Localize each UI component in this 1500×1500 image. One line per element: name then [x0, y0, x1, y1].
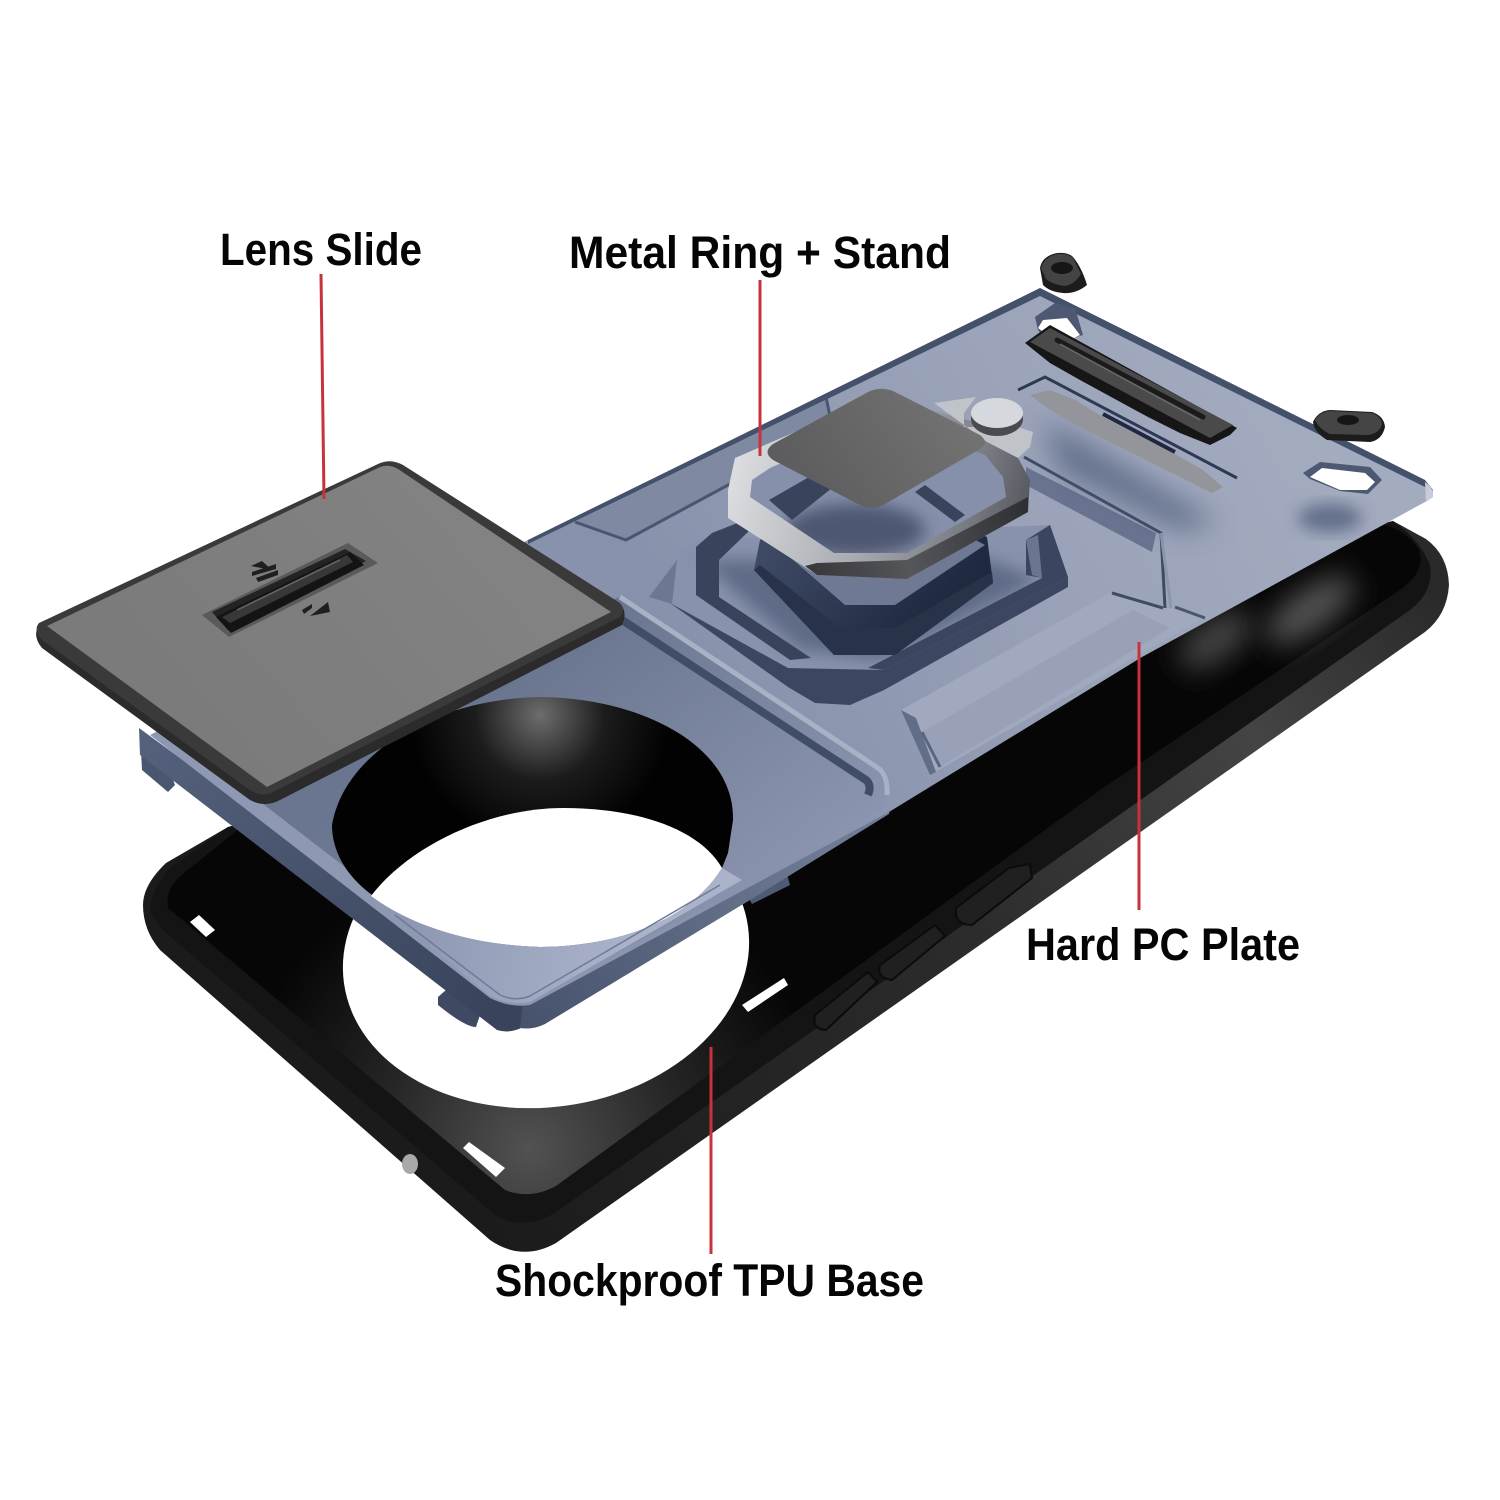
right groove — [868, 525, 1068, 670]
plate holes — [1035, 303, 1083, 345]
pointer: metal ring and stand — [758, 280, 762, 456]
right button — [1313, 410, 1385, 442]
lens panel recess — [180, 597, 887, 1002]
highlights on base interior — [1169, 600, 1261, 680]
base slots — [190, 915, 788, 1177]
platform lower skirt — [670, 577, 1068, 705]
top button — [1040, 253, 1087, 293]
slide arrow down — [302, 602, 330, 616]
shadows — [1043, 420, 1217, 530]
plate lower corner face — [371, 868, 742, 1003]
hexagon facet and line — [1026, 467, 1156, 552]
stand body — [754, 500, 993, 655]
ring band — [728, 395, 1030, 579]
platform shadow — [700, 560, 1040, 660]
hinge — [934, 397, 1033, 458]
slide switch — [202, 543, 378, 637]
pointer: shockproof TPU base — [710, 1047, 712, 1254]
plate right corner lip — [1425, 482, 1433, 502]
view through ring — [750, 420, 1006, 553]
loose buttons — [1025, 253, 1385, 445]
plate top face — [150, 288, 1433, 1006]
plate slots — [1030, 390, 1223, 493]
TPU base case — [143, 521, 1449, 1252]
slide arrow up — [251, 561, 278, 582]
label: metal ring and stand: Metal Ring + Stand — [569, 227, 951, 278]
left groove — [696, 520, 811, 660]
pointer: hard PC plate — [1138, 642, 1140, 910]
plate side bands — [139, 728, 528, 1031]
lens slide cover — [36, 461, 625, 804]
plate tabs — [140, 732, 175, 792]
camera cutout in base — [323, 776, 769, 1134]
ring mount platform — [649, 500, 1068, 705]
label: shockproof TPU base: Shockproof TPU Base — [495, 1255, 924, 1306]
hard PC plate — [139, 288, 1433, 1031]
base hole — [402, 1154, 418, 1174]
lower raised panel — [901, 593, 1205, 775]
long button — [1025, 325, 1237, 445]
label: hard PC plate: Hard PC Plate — [1026, 919, 1300, 970]
top left panel lines — [575, 400, 832, 540]
ring front facet — [805, 497, 1028, 579]
side buttons — [814, 864, 1032, 1030]
cross bars — [769, 465, 842, 520]
label: lens slide: Lens Slide — [220, 224, 422, 275]
lens opening in plate — [332, 697, 733, 947]
ring square plate — [768, 389, 985, 508]
pointer: lens slide — [321, 274, 324, 499]
metal ring and stand — [728, 389, 1033, 579]
